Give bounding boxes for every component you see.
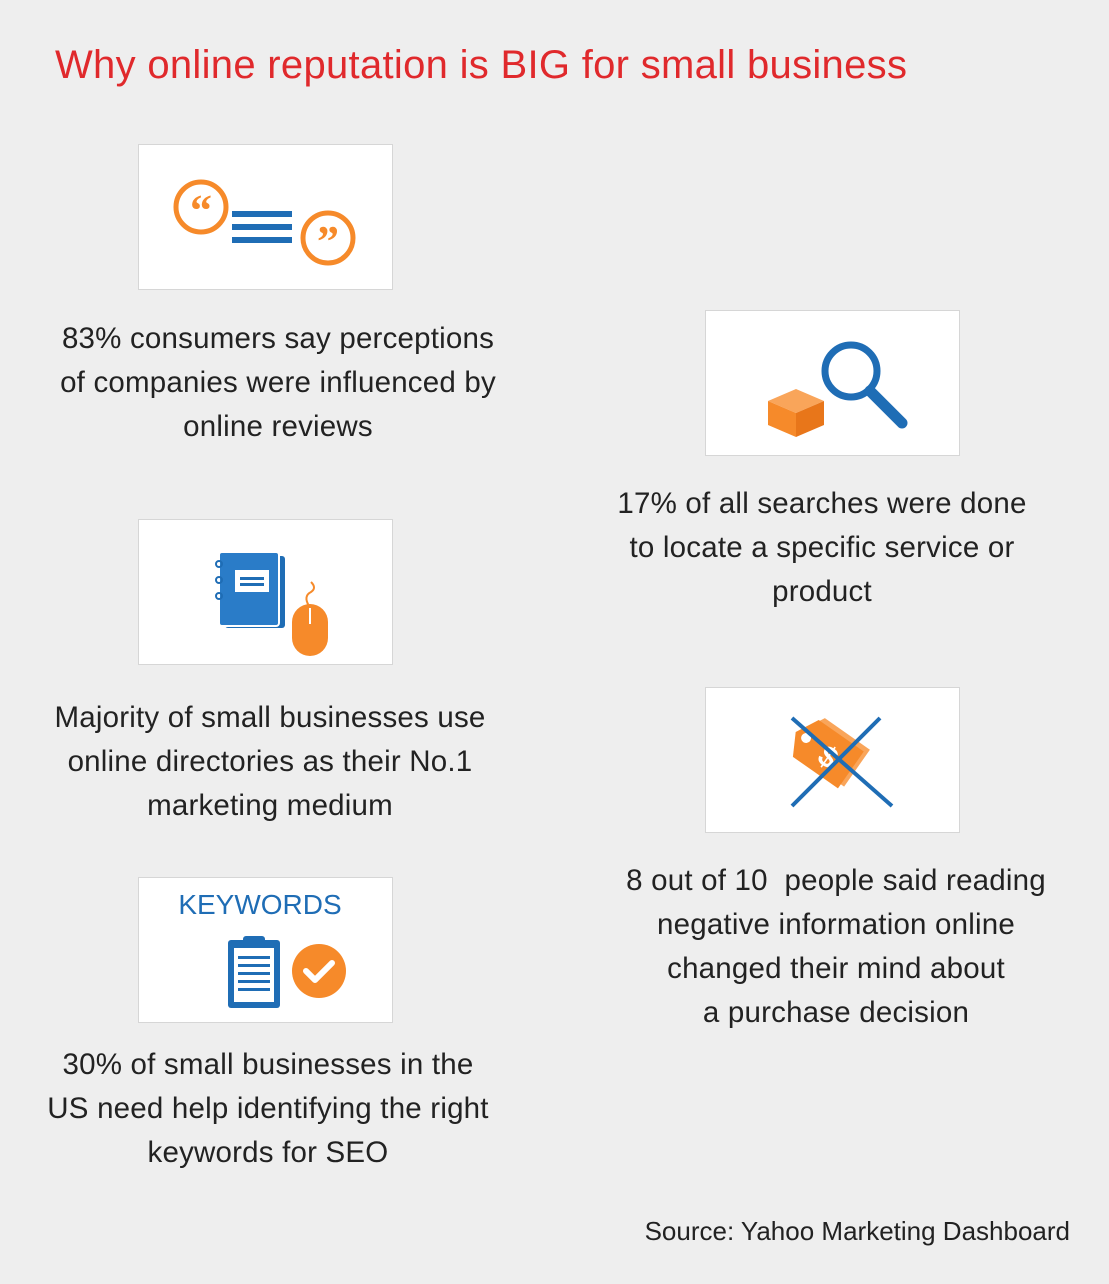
text 2: 17% of all searches were done	[617, 487, 1027, 520]
text 4: 8 out of 10 people said reading	[626, 864, 1046, 897]
text 5: 30% of small businesses in the	[62, 1048, 474, 1081]
icon: quotes: “	[190, 186, 212, 235]
text 1	[60, 322, 496, 443]
icon: quotes: ”	[317, 217, 339, 266]
icon: quotes	[176, 182, 353, 266]
text 4: changed their mind about	[667, 952, 1005, 985]
text 5: US need help identifying the right	[47, 1092, 489, 1125]
text 1: 83% consumers say perceptions	[62, 322, 494, 355]
source: Source: Yahoo Marketing Dashboard	[645, 1216, 1070, 1246]
panel: directory icon	[138, 519, 393, 665]
title: Why online reputation is BIG for small business	[55, 43, 907, 87]
text 3: Majority of small businesses use	[54, 701, 486, 734]
text 5: keywords for SEO	[148, 1136, 388, 1169]
text 4: a purchase decision	[703, 996, 969, 1029]
panel: price tag icon	[705, 687, 960, 833]
text 4: negative information online	[657, 908, 1015, 941]
text 2: to locate a specific service or	[630, 531, 1014, 564]
panel: keywords icon	[138, 877, 393, 1023]
text 1: of companies were influenced by	[60, 366, 496, 399]
text 4	[626, 864, 1046, 1029]
text 5	[47, 1048, 489, 1169]
panel: search icon	[705, 310, 960, 456]
panel: price tag icon: $	[812, 739, 844, 776]
text 1: online reviews	[183, 410, 373, 443]
panel: keywords icon: KEYWORDS	[178, 889, 342, 920]
text 2	[617, 487, 1027, 608]
text 3: online directories as their No.1	[68, 745, 472, 778]
panel: reviews icon	[138, 144, 393, 290]
text 2: product	[772, 575, 872, 608]
text 3: marketing medium	[147, 789, 393, 822]
text 3	[54, 701, 486, 822]
